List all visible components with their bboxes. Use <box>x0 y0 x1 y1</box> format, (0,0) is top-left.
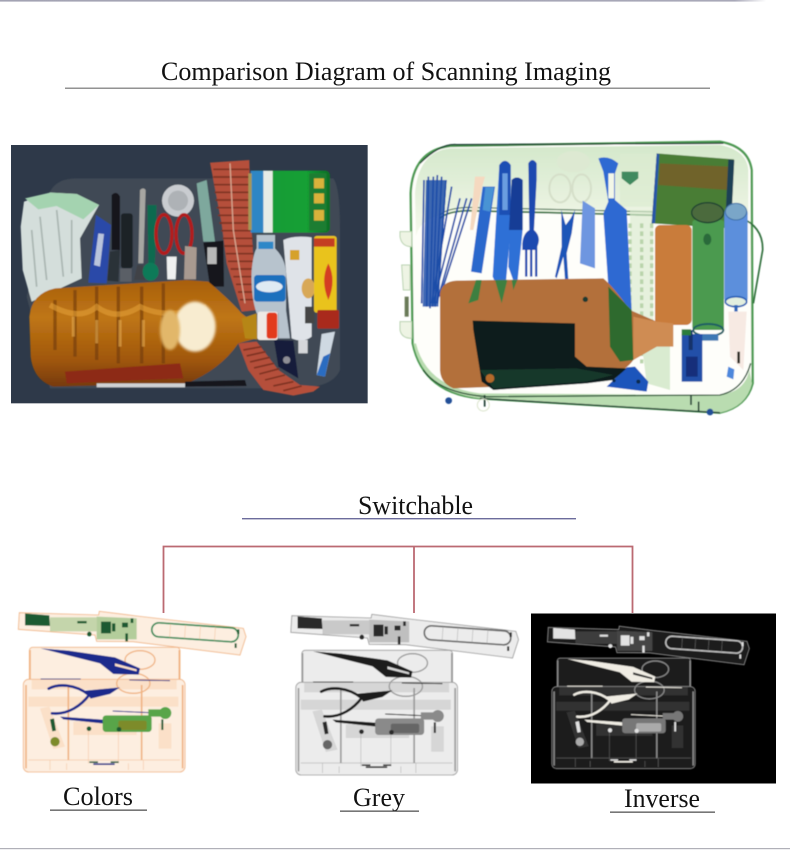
tin lid <box>162 185 194 217</box>
long knife <box>598 157 632 310</box>
water bottle <box>252 235 290 338</box>
label: Inverse: Inverse <box>624 784 700 813</box>
wire bundle <box>422 175 472 308</box>
tin <box>652 153 734 228</box>
blue lighter <box>317 332 335 377</box>
pink scissors and lid ghost <box>557 151 590 172</box>
oil bottle x-ray <box>440 278 657 388</box>
clip <box>622 172 638 185</box>
panel: Grey scan <box>291 614 518 775</box>
bottom border line <box>0 848 790 849</box>
spray can blue <box>724 208 748 303</box>
orange firecracker column <box>655 225 692 325</box>
top border line <box>0 0 790 2</box>
panel: Colors scan <box>18 611 246 772</box>
inner tray of suitcase <box>27 178 340 388</box>
plastic bag <box>21 193 99 302</box>
green tin <box>251 171 330 233</box>
firecrackers top <box>210 160 257 312</box>
spray can <box>283 237 312 340</box>
knife 2 <box>508 177 523 290</box>
cutter blade <box>580 201 595 268</box>
dark cleaver <box>473 321 627 390</box>
panel: Inverse scan <box>531 614 776 784</box>
small black device <box>274 340 298 378</box>
blue box in x-ray <box>470 177 485 230</box>
title: Comparison Diagram of Scanning Imaging <box>161 56 611 86</box>
oil bottle <box>29 280 257 387</box>
heading: Switchable: Switchable <box>358 491 473 520</box>
blue scissors <box>555 210 575 279</box>
fork <box>522 160 539 277</box>
label: Colors: Colors <box>63 782 133 811</box>
knives and cutlery <box>112 193 120 250</box>
teal cloth and box cutter <box>197 180 215 242</box>
knife 1 <box>493 161 511 303</box>
panel: photo of suitcase contents <box>11 145 368 403</box>
connector: red tree lines <box>164 546 632 613</box>
panel: colour X-ray of suitcase <box>400 142 763 415</box>
scissors <box>156 215 172 253</box>
label: Grey <box>340 783 419 812</box>
suitcase body <box>411 142 753 413</box>
blue box <box>88 215 111 283</box>
yellow gas can <box>314 236 337 313</box>
label: Grey: Grey <box>353 783 405 812</box>
lighter <box>727 367 734 379</box>
feet and screws <box>445 397 452 404</box>
small toy car <box>682 334 702 382</box>
firecrackers bottom <box>238 342 320 396</box>
gas canister <box>692 220 724 330</box>
